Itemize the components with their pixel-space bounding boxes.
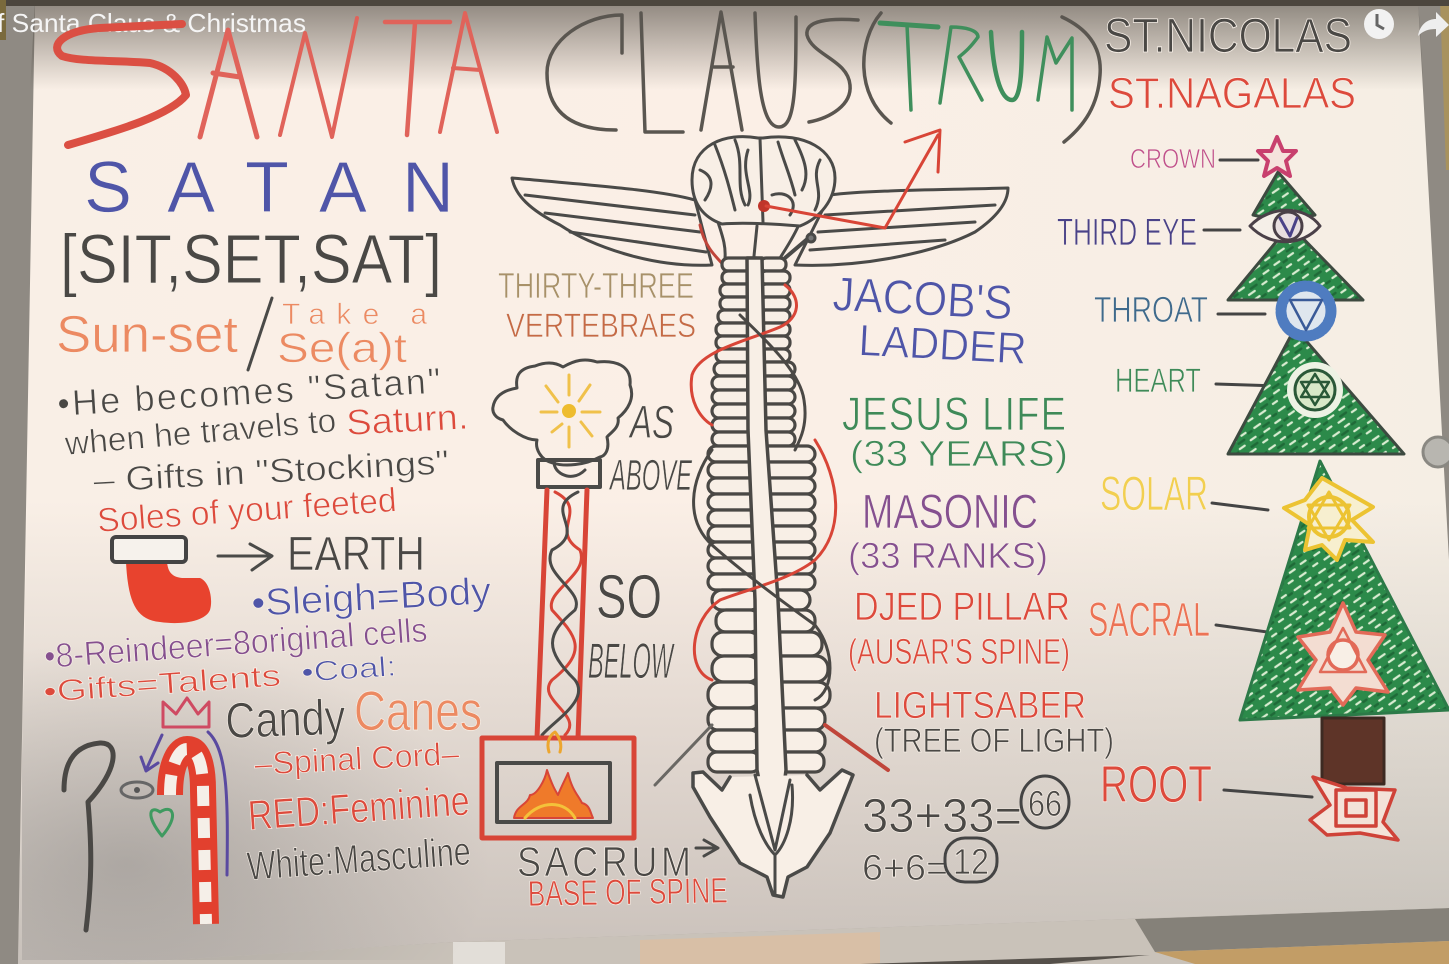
sum 12: 12 <box>953 841 989 882</box>
Red feminine: RED:Feminine <box>246 777 471 839</box>
as above: ABOVE <box>608 451 692 500</box>
third eye arrow <box>758 200 770 212</box>
Notes about Satan: Saturn. <box>345 396 469 443</box>
whiteboard tray <box>100 908 1449 964</box>
side nerves <box>655 725 712 785</box>
Jacob's ladder: LADDER <box>857 316 1028 374</box>
brain stem <box>718 222 815 258</box>
nadi serpent lines behind the ribs <box>700 225 730 272</box>
St Nagalas: ST.NAGALAS <box>1108 69 1356 118</box>
so below <box>588 563 675 689</box>
root chakra <box>1310 777 1398 840</box>
Take a Seat: Se(a)t <box>277 324 407 371</box>
root label: ROOT <box>1100 756 1212 814</box>
Sleigh = Body: •Sleigh=Body <box>250 570 492 625</box>
Masonic: MASONIC <box>862 486 1038 539</box>
wings <box>512 178 1008 265</box>
spinal cord column <box>747 258 786 860</box>
Take a Seat: Take a <box>282 298 427 331</box>
St Nicolas: ST.NICOLAS <box>1104 10 1352 63</box>
title: SANTA <box>57 13 497 145</box>
fireplace <box>482 732 634 838</box>
dark serpent <box>694 315 830 700</box>
coal: •Coal: <box>300 650 397 688</box>
Lightsaber <box>874 685 1114 760</box>
Djed pillar: (AUSAR'S SPINE) <box>848 631 1070 672</box>
christmas tree <box>1228 137 1449 840</box>
third eye label: THIRD EYE <box>1057 212 1197 254</box>
sum 66: 66 <box>1028 783 1062 824</box>
Masonic: (33 RANKS) <box>848 535 1048 576</box>
sacrum label: SACRUM <box>517 840 691 886</box>
sum 66: 33+33= <box>862 790 1022 843</box>
thirty three vertebraes <box>498 265 696 345</box>
crown label: CROWN <box>1130 143 1216 174</box>
Sit Set Sat: [SIT,SET,SAT] <box>60 221 442 298</box>
Candy canes: Canes <box>354 679 482 742</box>
Masonic <box>848 486 1048 576</box>
Notes about Satan <box>56 360 469 540</box>
Jesus life: (33 YEARS) <box>850 433 1068 474</box>
tree upper tier <box>1228 225 1363 300</box>
sacral chakra <box>1298 603 1388 705</box>
Jacob's ladder: JACOB'S <box>831 268 1014 330</box>
Notes about Satan: – Gifts in "Stockings" <box>92 443 450 500</box>
Lightsaber: (TREE OF LIGHT) <box>874 722 1114 760</box>
tree lower tier <box>1240 461 1449 720</box>
text: BELOW <box>588 633 675 689</box>
Notes about Satan: when he travels to <box>62 401 338 462</box>
Take a Seat <box>277 298 427 371</box>
throat chakra <box>1281 286 1331 336</box>
sum 12 <box>862 838 997 888</box>
Satan: SATAN <box>84 148 454 228</box>
icon: cloud with sun <box>493 360 632 465</box>
solar label: SOLAR <box>1100 468 1208 521</box>
sacrum <box>693 770 853 897</box>
White masculine: White:Masculine <box>246 829 472 889</box>
red serpent <box>691 285 836 680</box>
title: CLAUS <box>547 12 1100 142</box>
title: TRUM <box>880 23 1072 110</box>
third eye <box>1250 210 1320 242</box>
clock and share icons <box>1364 9 1449 39</box>
Candy canes: Candy <box>224 689 346 749</box>
tree middle tier <box>1228 328 1404 454</box>
arrow <box>218 544 272 570</box>
tree top tier <box>1253 172 1315 222</box>
Djed pillar: DJED PILLAR <box>854 585 1070 629</box>
video title: f Santa Claus & Christmas <box>0 8 306 38</box>
icon: third eye and heart <box>121 735 173 836</box>
trunk <box>1322 718 1384 784</box>
Jesus life: JESUS LIFE <box>842 388 1066 441</box>
Candy canes <box>224 679 482 749</box>
Sun-set: Sun-set <box>56 306 239 364</box>
board magnet <box>1423 437 1449 467</box>
icon: staff <box>64 743 113 930</box>
spinal cord: –Spinal Cord– <box>253 735 460 782</box>
sum 12: 6+6= <box>862 847 948 888</box>
so below: SO <box>596 563 662 632</box>
thirty three vertebraes: VERTEBRAES <box>506 307 696 345</box>
central spine figure <box>512 130 1008 897</box>
gifts talents: •Gifts=Talents <box>42 659 282 709</box>
brain <box>692 137 835 226</box>
solar plexus <box>1284 478 1373 560</box>
Jesus life <box>842 388 1068 474</box>
base of spine: BASE OF SPINE <box>527 870 728 914</box>
vertebra ribs <box>708 258 830 772</box>
heart label: HEART <box>1115 362 1201 400</box>
Lightsaber: LIGHTSABER <box>874 685 1086 727</box>
crown star <box>1258 137 1296 176</box>
Notes about Satan: Soles of your feeted <box>96 481 398 540</box>
crown <box>163 698 209 727</box>
thirty three vertebraes: THIRTY-THREE <box>498 265 694 306</box>
as above <box>608 396 692 500</box>
sacral label: SACRAL <box>1088 594 1210 647</box>
Notes about Satan: •He becomes "Satan" <box>56 360 442 424</box>
chimney with helix <box>537 460 600 738</box>
8 reindeer: •8-Reindeer=8original cells <box>43 611 429 676</box>
icon: stocking <box>112 537 211 623</box>
heart chakra <box>1287 362 1343 418</box>
icon: candy cane <box>170 732 227 924</box>
sum 66 <box>862 776 1069 843</box>
as above: AS <box>628 396 674 448</box>
Jacob's ladder <box>831 268 1028 374</box>
Djed pillar <box>848 585 1070 672</box>
throat label: THROAT <box>1094 289 1208 330</box>
EARTH: EARTH <box>287 528 425 581</box>
